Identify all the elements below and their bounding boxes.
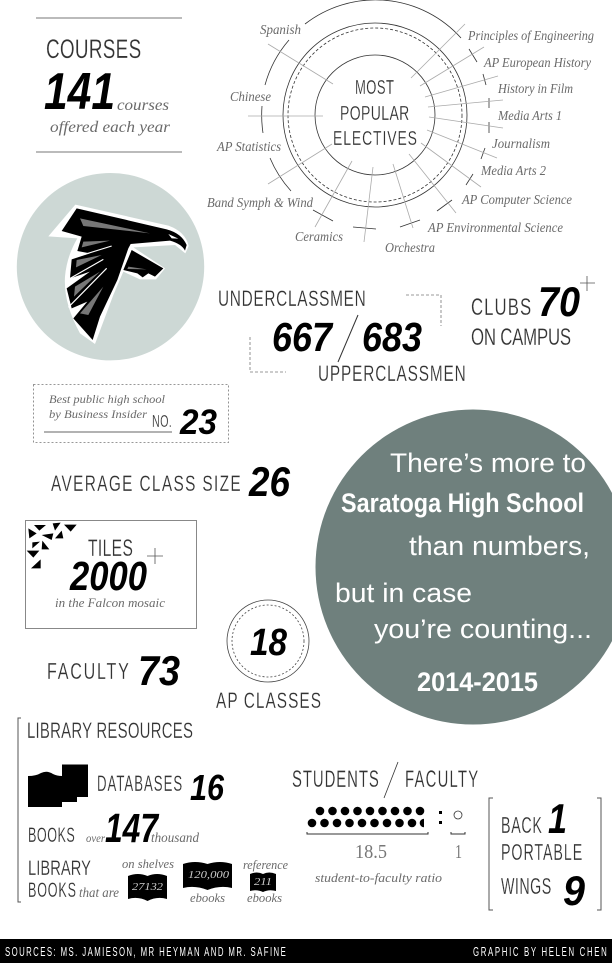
elective labels: [207, 22, 594, 255]
panel: library resources: that are: [79, 886, 119, 901]
icon: book 27132: [128, 874, 167, 901]
label: on campus: ON CAMPUS: [471, 324, 571, 351]
panel: headline circle: than numbers,: [409, 531, 590, 561]
panel: library resources: over: [86, 831, 105, 845]
elective labels: AP Computer Science: [461, 192, 572, 207]
panel: back portable wings: [489, 795, 601, 914]
number: 23: 23: [179, 403, 218, 442]
elective labels: AP Environmental Science: [427, 220, 563, 235]
footer: sources and credit: [0, 939, 612, 963]
elective labels: Orchestra: [385, 240, 435, 255]
number: 683: 683: [362, 314, 422, 360]
panel: courses: [36, 18, 182, 152]
chart: most popular electives radial diagram: [207, 0, 594, 255]
chart: student to faculty ratio: 1: [455, 841, 462, 863]
stat: AP classes: [216, 600, 321, 714]
chart: student to faculty ratio: student-to-faculty ratio: [315, 870, 443, 885]
panel: headline circle: you’re counting...: [374, 614, 592, 644]
panel: headline circle: but in case: [335, 578, 472, 608]
number: 667: 667: [272, 314, 334, 360]
panel: library resources: 120,000: [188, 870, 229, 881]
number: 16: 16: [190, 767, 225, 808]
elective labels: Ceramics: [295, 229, 343, 244]
footer: sources and credit: GRAPHIC BY HELEN CHEN: [473, 945, 607, 960]
stat: faculty: FACULTY: [47, 659, 129, 685]
panel: library resources: ebooks: [247, 890, 282, 905]
panel: library resources: 211: [254, 877, 272, 888]
panel: library resources: ebooks: [190, 890, 225, 905]
callout: business insider ranking: NO.: [152, 412, 172, 432]
stat: average class size: AVERAGE CLASS SIZE: [51, 472, 241, 497]
panel: back portable wings: BACK: [501, 814, 542, 839]
callout: business insider ranking: by Business Insider: [49, 407, 147, 421]
panel: library resources: thousand: [151, 831, 200, 846]
heading: courses: COURSES: [46, 34, 141, 64]
heading: most popular electives: [333, 76, 417, 150]
label: AP classes: AP CLASSES: [216, 689, 321, 714]
icon: book 120,000: [183, 862, 232, 890]
panel: library resources: on shelves: [122, 856, 174, 871]
footer: sources and credit: SOURCES: MS. JAMIESON, MR HEYMAN AND MR. SAFINE: [5, 945, 286, 960]
panel: library resources: BOOKS: [28, 878, 76, 902]
chart: student to faculty ratio: [292, 762, 478, 885]
panel: back portable wings: PORTABLE: [501, 841, 582, 866]
icon: mosaic triangles: [27, 523, 77, 568]
number: 70: 70: [538, 278, 580, 325]
number: 18: 18: [250, 622, 288, 664]
icon: book 211: [250, 872, 276, 892]
stat: average class size: [51, 458, 291, 505]
icon: falcon logo on circle: [17, 173, 204, 360]
stat: faculty: [47, 647, 180, 694]
panel: library resources: DATABASES: [97, 772, 182, 796]
elective labels: Media Arts 1: [497, 108, 562, 123]
panel: headline circle: 2014-2015: [417, 667, 538, 697]
number: 73: 73: [138, 647, 180, 694]
panel: mosaic tiles: TILES: [88, 536, 133, 562]
elective labels: Principles of Engineering: [467, 28, 594, 43]
number: 147: 147: [105, 805, 160, 851]
elective labels: AP European History: [483, 55, 591, 70]
heading: most popular electives: MOST: [355, 76, 394, 99]
label: upperclassmen: UPPERCLASSMEN: [318, 362, 466, 387]
chart: student to faculty ratio: FACULTY: [405, 767, 478, 793]
stat: underclassmen upperclassmen: UNDERCLASSMEN: [218, 287, 366, 312]
stat: clubs on campus: CLUBS: [471, 294, 531, 321]
stat: underclassmen upperclassmen: [218, 287, 466, 387]
number: 9: 9: [563, 867, 586, 914]
panel: back portable wings: WINGS: [501, 875, 551, 900]
chart: student to faculty ratio: STUDENTS: [292, 767, 379, 793]
elective labels: Journalism: [492, 136, 550, 151]
elective labels: Chinese: [230, 89, 271, 104]
stat: clubs on campus: [471, 276, 595, 351]
elective labels: Media Arts 2: [480, 163, 546, 178]
pictogram: student dots: [308, 807, 442, 827]
panel: library resources: [18, 718, 288, 905]
number: 141 courses: 141: [44, 63, 115, 121]
text: offered each year: offered each year: [50, 119, 171, 136]
callout: business insider ranking: [34, 384, 228, 442]
panel: library resources: LIBRARY: [28, 856, 91, 880]
elective labels: History in Film: [497, 81, 573, 96]
text: courses: courses: [117, 97, 169, 114]
panel: headline circle: [316, 410, 612, 724]
panel: library resources: reference: [243, 857, 288, 872]
elective labels: Band Symph & Wind: [207, 195, 313, 210]
heading: most popular electives: POPULAR: [340, 101, 409, 125]
number: 1: 1: [548, 795, 567, 842]
heading: library resources: LIBRARY RESOURCES: [27, 718, 193, 743]
number: 26: 26: [248, 458, 291, 505]
elective labels: AP Statistics: [216, 139, 281, 154]
panel: mosaic tiles: in the Falcon mosaic: [55, 595, 165, 610]
elective labels: Spanish: [260, 22, 301, 37]
callout: business insider ranking: Best public high school: [49, 392, 166, 406]
chart: student to faculty ratio: 18.5: [355, 841, 387, 863]
panel: library resources: BOOKS: [28, 823, 75, 847]
panel: mosaic tiles: [26, 520, 196, 628]
heading: most popular electives: ELECTIVES: [333, 126, 417, 150]
panel: headline circle: There’s more to: [390, 448, 586, 478]
icon: database books: [28, 764, 88, 807]
number: 2000: 2000: [69, 553, 147, 599]
panel: library resources: 27132: [132, 882, 163, 893]
